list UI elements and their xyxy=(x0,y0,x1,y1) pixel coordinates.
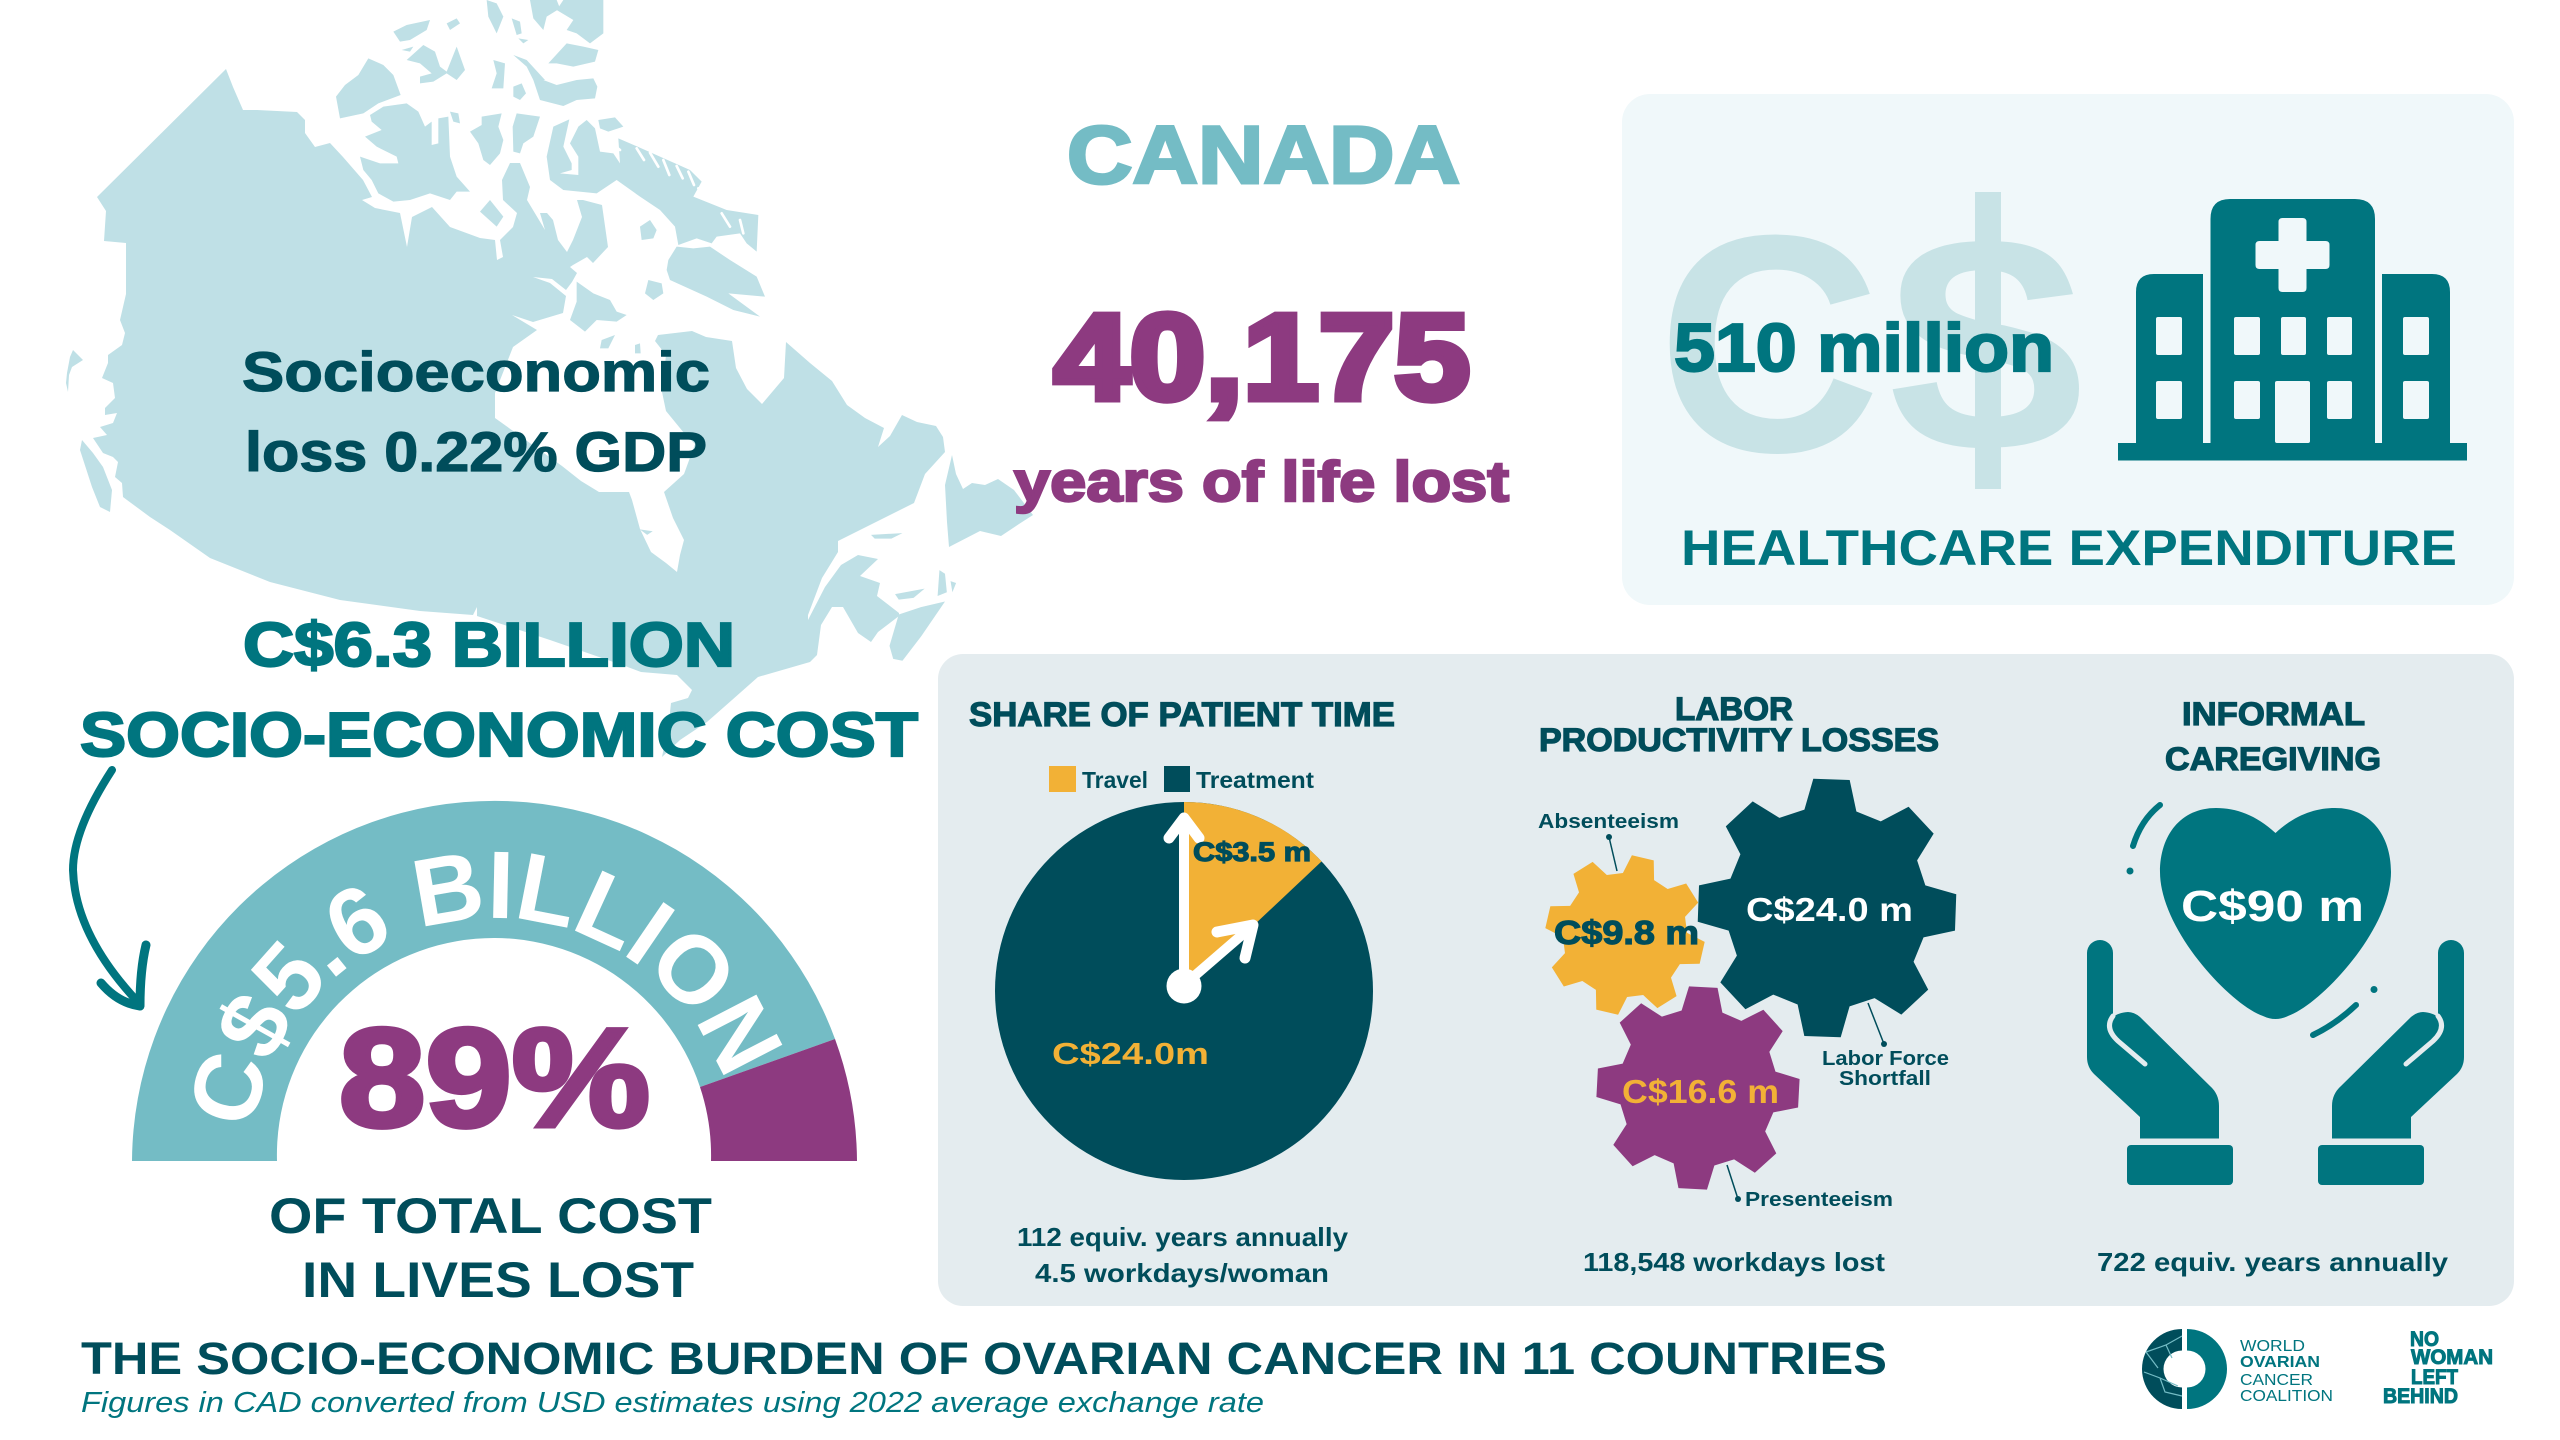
section: informal caregiving xyxy=(2087,696,2464,1277)
gear: absenteeism xyxy=(1530,840,1720,1030)
gauge caption xyxy=(269,1188,712,1308)
currency watermark: C xyxy=(1657,170,1881,517)
travel value: C$3.5 m xyxy=(1193,837,1311,867)
logo: No Woman Left Behind: WOMAN xyxy=(2411,1346,2493,1369)
total cost heading: C$6.3 BILLION xyxy=(243,611,735,680)
currency watermark xyxy=(1657,170,2084,517)
map statement: socioeconomic loss xyxy=(242,340,710,483)
total cost heading: SOCIO-ECONOMIC COST xyxy=(80,701,918,770)
logo: No Woman Left Behind: NO xyxy=(2410,1328,2439,1351)
years of life lost stat xyxy=(1014,289,1509,514)
currency watermark: $ xyxy=(1888,170,2084,517)
Haida Gwaii xyxy=(66,350,83,392)
callout: absenteeism xyxy=(1538,811,1679,871)
arrow: down to gauge xyxy=(73,770,146,1006)
section heading: CAREGIVING xyxy=(2165,741,2381,777)
gear: absenteeism: C$9.8 m xyxy=(1554,914,1699,951)
east coast islands xyxy=(640,529,956,661)
callout: labor force shortfall: Shortfall xyxy=(1839,1068,1931,1090)
icon: left hand xyxy=(2087,940,2233,1185)
gauge caption: IN LIVES LOST xyxy=(302,1252,694,1308)
section: share of patient time xyxy=(969,696,1395,1288)
callout: presenteeism: Presenteeism xyxy=(1745,1189,1893,1211)
Vancouver Island xyxy=(80,440,112,512)
map statement: socioeconomic loss: Socioeconomic xyxy=(242,340,710,403)
gear: presenteeism xyxy=(1592,982,1804,1194)
arctic islands xyxy=(336,0,765,353)
logo: World Ovarian Cancer Coalition: WORLD xyxy=(2240,1338,2305,1355)
gear: presenteeism: C$16.6 m xyxy=(1622,1073,1779,1110)
percentage: 89% xyxy=(339,999,650,1156)
Newfoundland xyxy=(945,455,1033,547)
logo: World Ovarian Cancer Coalition: CANCER xyxy=(2240,1372,2313,1389)
icon: hospital xyxy=(2118,199,2467,460)
legend: Treatment xyxy=(1196,767,1314,793)
section heading: INFORMAL xyxy=(2182,696,2365,732)
legend: Travel xyxy=(1082,767,1148,793)
amount: 510 million xyxy=(1674,310,2054,386)
gear: labor force shortfall: C$24.0 m xyxy=(1746,891,1913,928)
logo: No Woman Left Behind xyxy=(2383,1328,2493,1408)
callout: labor force shortfall: Labor Force xyxy=(1822,1048,1949,1070)
panel caption: HEALTHCARE EXPENDITURE xyxy=(1681,520,2457,576)
logo: No Woman Left Behind: BEHIND xyxy=(2383,1385,2458,1408)
map statement: socioeconomic loss: loss 0.22% GDP xyxy=(245,420,707,483)
gauge caption: OF TOTAL COST xyxy=(269,1188,712,1244)
icon: right hand xyxy=(2318,940,2464,1185)
icon: heart xyxy=(2160,808,2391,1019)
panel: indirect costs xyxy=(938,654,2514,1306)
heart value: C$90 m xyxy=(2181,882,2364,931)
section heading xyxy=(2165,696,2381,777)
logo: World Ovarian Cancer Coalition xyxy=(2142,1329,2333,1409)
map of Canada xyxy=(66,0,1033,757)
logo: World Ovarian Cancer Coalition: OVARIAN xyxy=(2240,1354,2320,1371)
section footnote xyxy=(1017,1222,1349,1288)
section footnote: 4.5 workdays/woman xyxy=(1035,1258,1329,1288)
section heading: SHARE OF PATIENT TIME xyxy=(969,696,1395,734)
section footnote: 118,548 workdays lost xyxy=(1583,1247,1885,1277)
callout: absenteeism: Absenteeism xyxy=(1538,811,1679,833)
logo: World Ovarian Cancer Coalition: COALITION xyxy=(2240,1388,2333,1405)
subtitle: Figures in CAD converted from USD estimates using 2022 average exchange rate xyxy=(81,1387,1264,1419)
section heading xyxy=(1539,691,1939,758)
callout: presenteeism xyxy=(1727,1165,1893,1211)
section heading: LABOR xyxy=(1675,691,1793,727)
section footnote: 722 equiv. years annually xyxy=(2097,1247,2449,1277)
legend xyxy=(1049,766,1314,793)
total cost heading xyxy=(80,611,918,770)
treatment value: C$24.0m xyxy=(1052,1036,1209,1071)
gear: labor force shortfall xyxy=(1694,775,1960,1041)
curved label: C$5.6 BILLION xyxy=(194,852,782,1120)
clock hands xyxy=(1166,818,1253,1004)
section: labor productivity losses xyxy=(1530,691,1960,1277)
section heading: PRODUCTIVITY LOSSES xyxy=(1539,722,1939,758)
page title: THE SOCIO-ECONOMIC BURDEN OF OVARIAN CANCER IN 11 COUNTRIES xyxy=(81,1333,1887,1384)
sparkles xyxy=(2126,805,2378,1035)
country heading: CANADA xyxy=(1067,110,1460,201)
pie chart xyxy=(995,802,1373,1180)
years of life lost stat: years of life lost xyxy=(1014,450,1509,514)
panel: healthcare expenditure xyxy=(1622,94,2514,605)
logo: No Woman Left Behind: LEFT xyxy=(2411,1366,2458,1389)
years of life lost stat: 40,175 xyxy=(1054,289,1470,425)
callout: labor force shortfall xyxy=(1822,1003,1949,1090)
gauge: share of cost in lives lost xyxy=(132,800,857,1161)
section footnote: 112 equiv. years annually xyxy=(1017,1222,1349,1252)
